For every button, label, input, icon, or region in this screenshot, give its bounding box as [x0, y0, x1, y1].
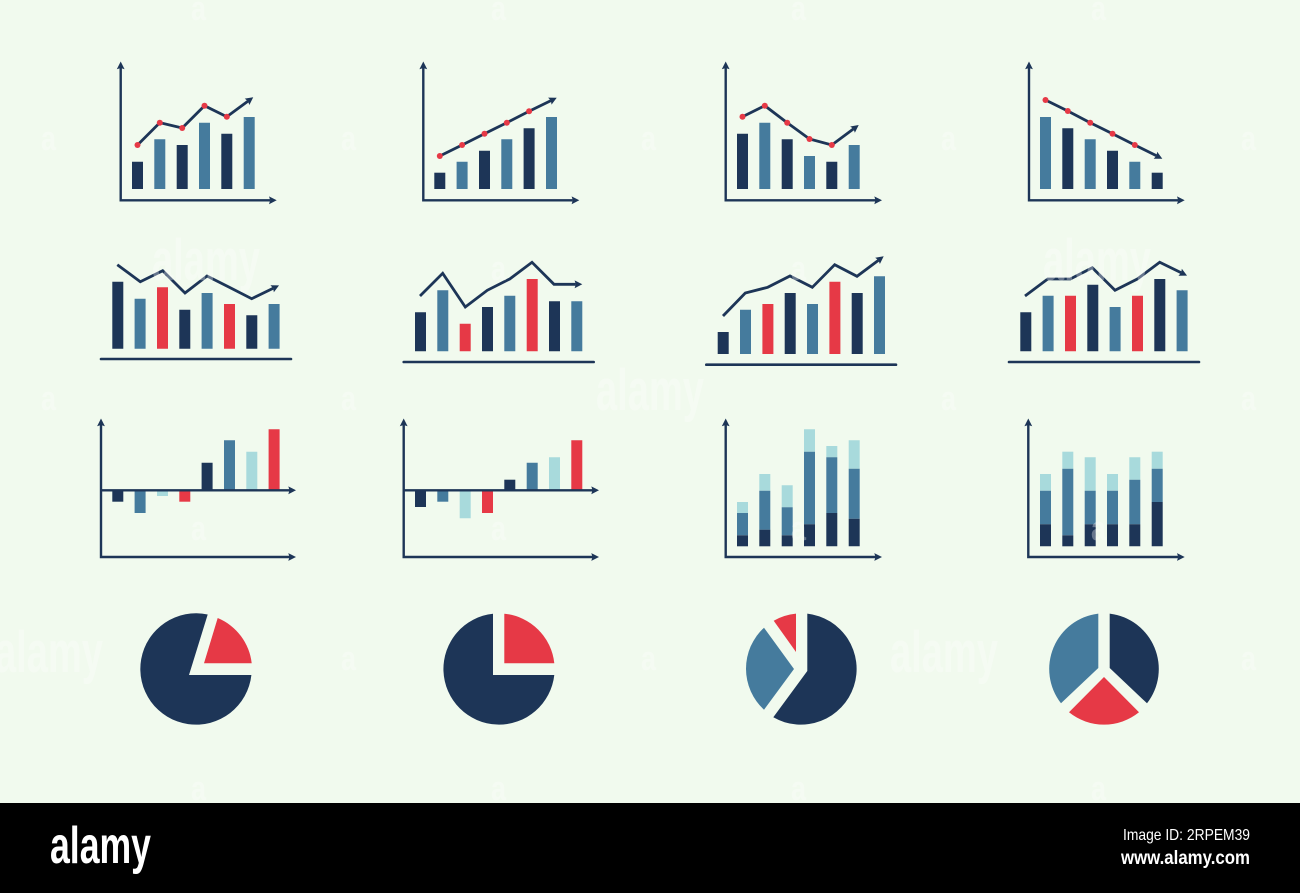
zero line arrow	[101, 489, 290, 491]
stacked bars	[1046, 452, 1157, 546]
pie chart: three unequal slices	[746, 614, 857, 725]
watermarks: a	[1241, 120, 1257, 158]
trend arrow	[723, 260, 878, 316]
zero line arrow	[404, 489, 592, 491]
trend arrow	[138, 101, 248, 145]
watermarks: a	[1241, 380, 1257, 418]
data points	[134, 103, 230, 148]
watermarks: a	[191, 510, 207, 548]
watermarks: a	[1241, 640, 1257, 678]
baseline	[706, 363, 896, 366]
stacked bars	[742, 429, 854, 546]
trend arrow	[440, 101, 551, 156]
bars	[138, 117, 249, 189]
footer logo: alamy	[50, 817, 151, 875]
watermarks: a	[491, 250, 507, 288]
watermarks: alamy	[152, 228, 260, 293]
chart: eight bars with peak zigzag line	[404, 262, 594, 362]
baseline	[1009, 361, 1199, 363]
bars	[420, 279, 577, 351]
chart: stacked bars, even	[1028, 425, 1178, 557]
footer bar	[0, 803, 1300, 893]
bars	[420, 440, 577, 518]
watermarks: a	[341, 640, 357, 678]
watermarks: a	[41, 120, 57, 158]
chart: positive and negative bars, small losses	[101, 425, 290, 557]
watermarks: a	[1091, 770, 1107, 808]
axes	[726, 68, 876, 200]
chart: eight bars with wavy line	[1009, 262, 1199, 362]
watermarks: a	[791, 770, 807, 808]
chart: positive and negative bars, larger losses	[404, 425, 592, 557]
watermarks: a	[941, 120, 957, 158]
baseline	[404, 361, 594, 363]
axes	[121, 68, 270, 200]
watermarks: alamy	[890, 620, 998, 685]
bars	[723, 276, 880, 354]
watermarks: a	[191, 770, 207, 808]
axes	[1029, 68, 1178, 200]
pie chart: quarter red slice	[443, 614, 554, 725]
pie chart: narrow red slice	[140, 613, 252, 725]
watermarks: alamy	[596, 358, 704, 423]
watermarks: a	[791, 250, 807, 288]
trend arrow	[1025, 262, 1181, 296]
trend arrow	[117, 265, 273, 299]
image id: Image ID: 2RPEM39	[1123, 827, 1250, 844]
website: www.alamy.com	[1120, 848, 1250, 869]
axes	[726, 425, 876, 557]
bars	[1026, 279, 1182, 351]
trend arrow	[1046, 100, 1156, 156]
watermarks: a	[41, 380, 57, 418]
bars	[440, 117, 552, 189]
watermarks: a	[791, 510, 807, 548]
watermarks: a	[341, 120, 357, 158]
chart: eight bars with falling zigzag line	[101, 265, 291, 359]
watermarks: a	[1091, 510, 1107, 548]
bars	[1046, 117, 1157, 189]
chart: declining bars with straight trend line	[1029, 68, 1178, 200]
watermarks: a	[641, 120, 657, 158]
trend arrow	[742, 106, 854, 145]
data points	[1042, 97, 1138, 148]
watermarks: a	[941, 380, 957, 418]
axes	[101, 425, 290, 557]
baseline	[101, 358, 291, 360]
chart: steady growth bars with straight trend line	[423, 68, 573, 200]
chart: eight bars with rising zigzag line	[706, 260, 896, 365]
chart: rising bars with red-dot trend line	[121, 68, 270, 200]
watermarks: a	[641, 640, 657, 678]
chart: stacked bars, growing	[726, 425, 876, 557]
chart: dip and recovery bars with trend line	[726, 68, 876, 200]
watermarks: a	[491, 770, 507, 808]
data points	[437, 108, 532, 159]
watermarks: alamy	[1043, 228, 1151, 293]
bars	[118, 429, 274, 513]
trend arrow	[420, 262, 576, 307]
watermarks: a	[491, 510, 507, 548]
watermarks: a	[341, 380, 357, 418]
pie chart: three equal slices	[1049, 614, 1159, 725]
bars	[742, 123, 854, 189]
bars	[118, 282, 274, 349]
data points	[740, 103, 835, 148]
axes	[1028, 425, 1178, 557]
axes	[423, 68, 573, 200]
axes	[404, 425, 592, 557]
